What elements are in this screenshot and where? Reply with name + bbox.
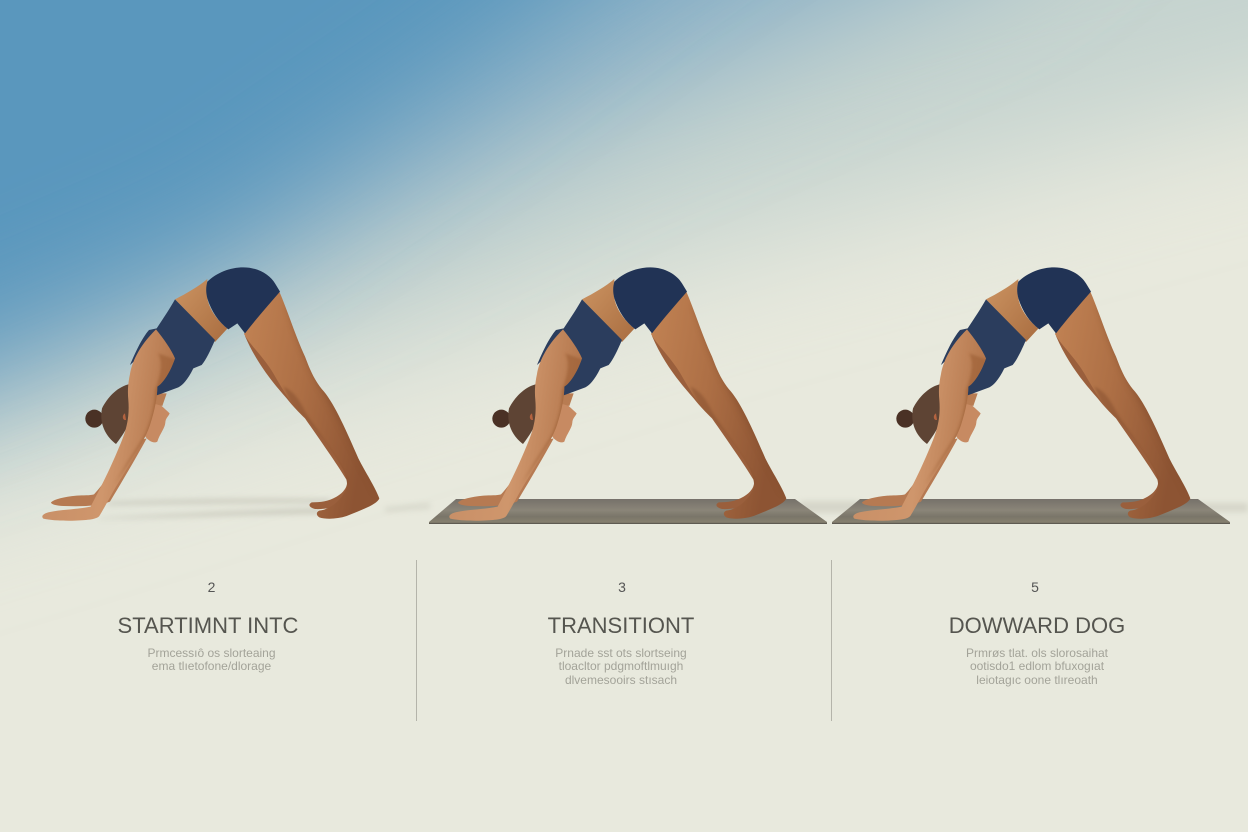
panel: step 5 text <box>949 579 1125 687</box>
panel: step 5 text: Prmrøs tlat. ols slorosaihat <box>966 646 1108 660</box>
panel: step 3 text: 3 <box>618 579 626 595</box>
figure 3: downward dog pose <box>853 267 1198 521</box>
panel: step 3 text: Prnade sst ots slortseing <box>555 646 687 660</box>
divider 1 <box>416 560 417 721</box>
figure 2: transition pose <box>449 267 794 521</box>
panel: step 3 text: tloacltor pdgmoftlmuıgh <box>559 659 683 673</box>
panel: step 3 text: TRANSITIONT <box>548 613 694 638</box>
panel: step 3 text: dlvemesooirs stısach <box>565 673 677 687</box>
panel: step 3 text <box>548 579 694 687</box>
divider 2 <box>831 560 832 721</box>
yoga mat: figure 2 <box>429 499 827 524</box>
panel: step 2 text: ema tlıetofone/dlorage <box>152 659 271 673</box>
panel: step 5 text: ootisdo1 edlom bfuxogıat <box>970 659 1104 673</box>
panel: step 2 text: Prmcessıô os slorteaing <box>147 646 276 660</box>
panel: step 2 text: 2 <box>208 579 215 595</box>
yoga mat: figure 3 <box>832 499 1230 524</box>
panel: step 2 text: STARTIMNT INTC <box>118 613 298 638</box>
panel: step 5 text: 5 <box>1031 579 1039 595</box>
figure 1: start pose <box>42 267 387 521</box>
figure 2 and 3 ground shadow band <box>800 501 1248 513</box>
figure 1 ground shadow <box>100 499 430 519</box>
panel: step 5 text: DOWWARD DOG <box>949 613 1125 638</box>
panel: step 5 text: leiotagıc oone tlıreoath <box>976 673 1098 687</box>
illustration: three yoga poses <box>42 267 1248 524</box>
panel: step 2 text <box>118 579 298 673</box>
